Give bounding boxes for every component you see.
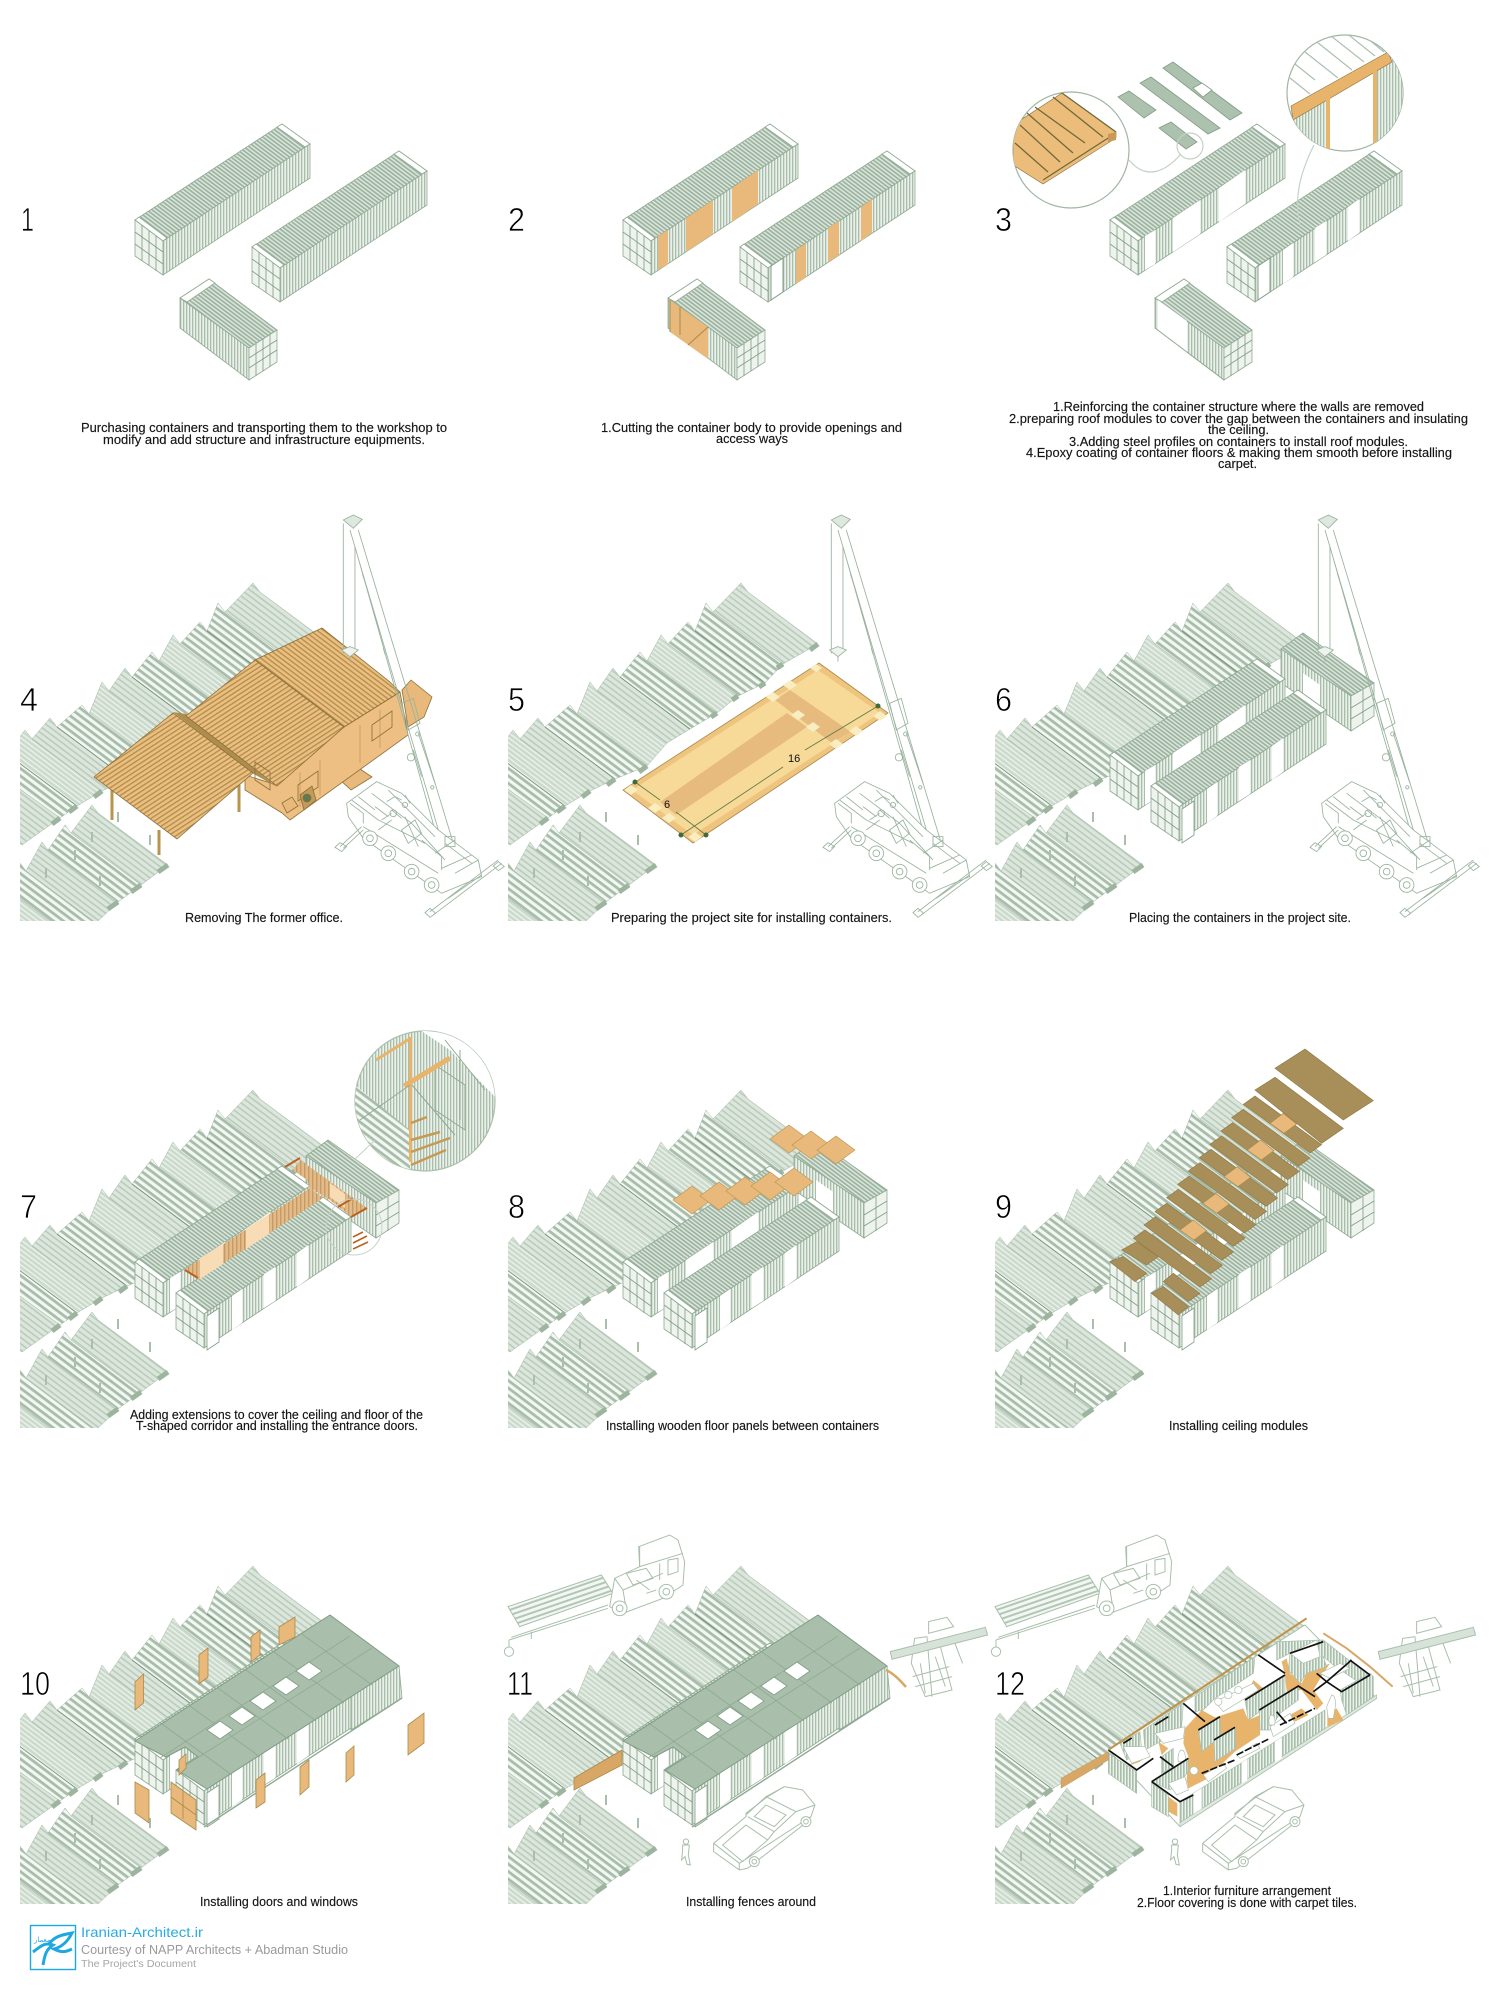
log piles <box>488 583 818 940</box>
step number 10: 10 <box>20 1665 50 1702</box>
caption 12: 2.Floor covering is done with carpet tiles. <box>1137 1896 1357 1910</box>
caption 3: 1.Reinforcing the container structure where the walls are removed <box>1053 400 1424 414</box>
crane <box>823 515 992 917</box>
connector line <box>354 1140 375 1160</box>
caption 8: Installing wooden floor panels between containers <box>606 1419 879 1433</box>
roof modules <box>1118 62 1242 149</box>
lifter <box>1378 1617 1476 1697</box>
step number 4: 4 <box>20 681 38 718</box>
caption 3: 3.Adding steel profiles on containers to install roof modules. <box>1069 435 1408 449</box>
step number 9: 9 <box>995 1188 1012 1225</box>
panel 8: wooden floor panels <box>488 1090 887 1447</box>
panel 7: corridor extensions <box>0 1030 498 1447</box>
roof light openings <box>1180 1113 1297 1240</box>
panel 9: ceiling modules <box>975 1049 1374 1447</box>
crane <box>1310 515 1479 917</box>
caption 1: modify and add structure and infrastructure equipments. <box>103 433 425 447</box>
caption 2: access ways <box>716 432 788 446</box>
caption 3: 4.Epoxy coating of container floors & making them smooth before installing <box>1026 446 1452 460</box>
fence <box>574 1750 622 1790</box>
step number 2: 2 <box>508 201 525 238</box>
detail circle: steel profile <box>1287 32 1405 155</box>
log piles <box>488 1090 818 1447</box>
containers on site <box>1110 633 1374 843</box>
site plate plan <box>623 663 888 843</box>
truck <box>991 1535 1172 1656</box>
log piles <box>0 583 330 940</box>
step number 7: 7 <box>20 1188 37 1225</box>
caption 11: Installing fences around <box>686 1895 816 1909</box>
panel 1: purchasing containers <box>21 124 447 447</box>
building with roof <box>623 1615 890 1827</box>
caption 3: carpet. <box>1218 457 1257 471</box>
step number 5: 5 <box>508 681 525 718</box>
panel 4: removing the former office <box>0 515 504 940</box>
log piles <box>0 1090 330 1447</box>
building with roof <box>135 1615 402 1827</box>
site name: Iranian-Architect.ir <box>81 1924 203 1940</box>
ceiling modules <box>1110 1049 1373 1315</box>
caption 12: 1.Interior furniture arrangement <box>1163 1884 1332 1898</box>
interior cutaway <box>1108 1625 1377 1827</box>
logo frame <box>30 1926 76 1970</box>
source logo and credits <box>30 1924 348 1970</box>
containers <box>1110 1140 1374 1350</box>
caption 10: Installing doors and windows <box>200 1895 358 1909</box>
caption 6: Placing the containers in the project site. <box>1129 911 1351 925</box>
floor panels <box>673 1125 855 1214</box>
panel 3: reinforcing structure and roof modules <box>995 32 1468 471</box>
caption 3: the ceiling. <box>1208 423 1269 437</box>
front wall door gaps <box>1193 1737 1282 1814</box>
containers with extensions <box>135 1140 399 1350</box>
log piles <box>975 583 1305 940</box>
container walls <box>1108 1640 1373 1823</box>
caption 7: T-shaped corridor and installing the entrance doors. <box>136 1419 418 1433</box>
panel 5: preparing the project site <box>488 515 992 940</box>
person <box>682 1839 690 1865</box>
step number 12: 12 <box>995 1665 1025 1702</box>
carpet floors <box>1127 1658 1355 1817</box>
former office building <box>94 628 432 855</box>
panel 6: placing containers <box>975 515 1479 940</box>
step number 11: 11 <box>507 1665 533 1702</box>
detail circle: corridor frame <box>340 1030 498 1171</box>
step number 8: 8 <box>508 1188 525 1225</box>
cut wall lines <box>1108 1642 1370 1802</box>
caption 2: 1.Cutting the container body to provide openings and <box>601 421 902 435</box>
logo frame: معمار <box>33 1936 51 1944</box>
caption 3: 2.preparing roof modules to cover the gap between the containers and insulating <box>1009 412 1468 426</box>
caption 1: Purchasing containers and transporting them to the workshop to <box>81 421 447 435</box>
panel 10: doors and windows <box>0 1566 424 1923</box>
truck <box>504 1535 685 1656</box>
connector lines <box>1129 145 1314 225</box>
detail circle: wooden roof module <box>1013 92 1129 208</box>
pickup <box>1203 1787 1304 1870</box>
crane <box>335 515 504 917</box>
caption 9: Installing ceiling modules <box>1169 1419 1308 1433</box>
panel 2: cutting openings <box>508 124 915 446</box>
courtesy line: Courtesy of NAPP Architects + Abadman Studio <box>81 1943 348 1957</box>
doors and windows <box>135 1617 424 1830</box>
person <box>1171 1839 1179 1865</box>
lifter <box>890 1617 988 1697</box>
document line: The Project's Document <box>81 1958 196 1970</box>
panel 12: interior arrangement <box>975 1535 1476 1923</box>
fence lines <box>1061 1618 1393 1788</box>
step number 1: 1 <box>21 201 34 238</box>
containers <box>623 1140 887 1350</box>
panel 11: fences <box>488 1535 988 1923</box>
furniture <box>1123 1640 1350 1795</box>
log piles <box>488 1566 818 1923</box>
dimension 16: 16 <box>788 753 800 765</box>
caption 5: Preparing the project site for installing containers. <box>611 911 892 925</box>
containers with white openings <box>1110 124 1402 380</box>
containers with orange cut openings <box>623 124 915 380</box>
dimension 6: 6 <box>664 799 670 811</box>
step number 6: 6 <box>995 681 1012 718</box>
log piles <box>0 1566 330 1923</box>
log piles <box>975 1090 1305 1447</box>
log piles <box>975 1566 1305 1923</box>
caption 7: Adding extensions to cover the ceiling and floor of the <box>130 1408 423 1422</box>
containers <box>135 124 427 380</box>
step number 3: 3 <box>995 201 1012 238</box>
caption 4: Removing The former office. <box>185 911 343 925</box>
pickup <box>714 1787 815 1870</box>
